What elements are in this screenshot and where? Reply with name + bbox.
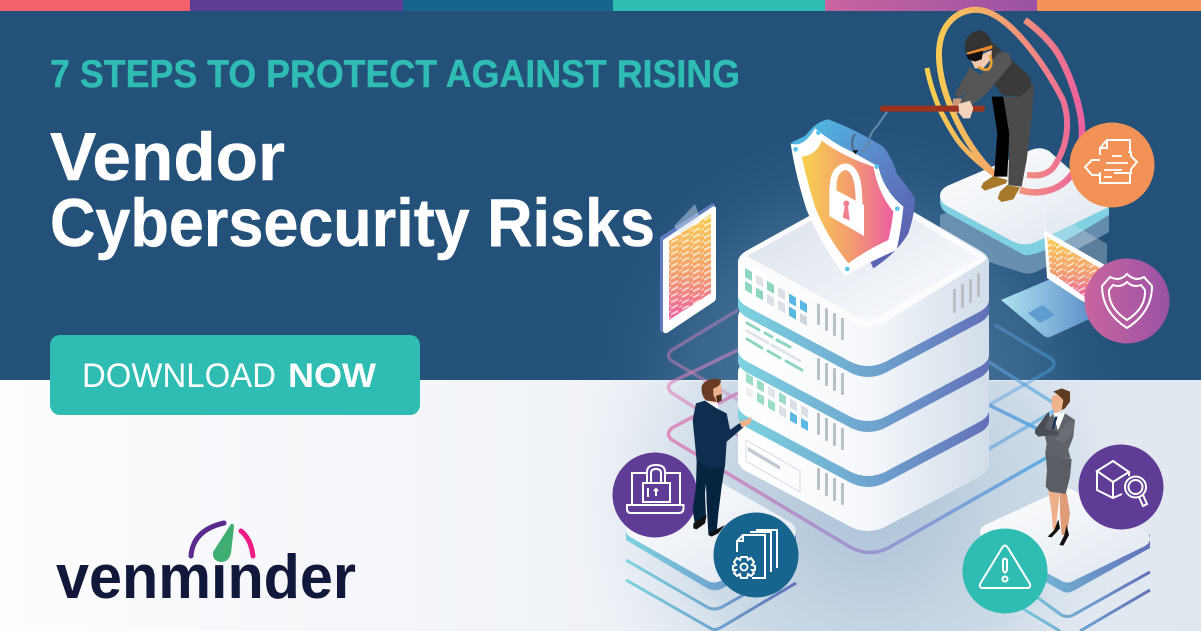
main title: Cybersecurity Risks — [50, 185, 655, 261]
venminder logo: venminder — [56, 543, 356, 612]
icon: cube with magnifier — [1078, 444, 1164, 530]
shield with lock — [791, 110, 915, 276]
businessman figure — [693, 379, 752, 537]
download button: DOWNLOAD — [82, 357, 276, 395]
jacket — [1045, 413, 1075, 458]
top colour strip — [0, 0, 1201, 11]
jacket and arms — [952, 42, 1032, 113]
hacker figure — [880, 31, 1034, 202]
hand — [958, 101, 973, 118]
server layer 1 with top face — [738, 187, 989, 377]
server layer 4 — [738, 352, 989, 531]
navy background — [0, 0, 1201, 381]
connecting circuit lines — [668, 310, 1064, 552]
tablet — [660, 203, 716, 333]
main title: Vendor — [50, 119, 285, 195]
main title — [50, 119, 655, 261]
icon: shield — [1084, 258, 1170, 344]
head — [1052, 394, 1063, 413]
server layer 2 — [738, 242, 989, 432]
icon: documents with gear — [714, 512, 798, 598]
skirt — [1046, 454, 1072, 494]
background glow — [560, 60, 1201, 631]
lower-right platform — [980, 488, 1150, 631]
icon: laptop with lock — [612, 452, 698, 538]
server layer 3 — [738, 297, 989, 487]
download button: NOW — [288, 357, 377, 395]
head with mask — [965, 31, 992, 70]
trousers — [992, 83, 1034, 187]
hacker rings — [927, 10, 1082, 192]
icon: document with arrows — [1070, 122, 1154, 208]
light lower background — [0, 380, 1201, 631]
lower-left platform — [626, 480, 796, 630]
businesswoman figure — [1035, 388, 1075, 546]
top-right platform — [940, 148, 1109, 274]
download button — [50, 335, 420, 415]
boots — [981, 176, 1020, 202]
legs and heels — [1048, 490, 1070, 546]
server stack — [738, 187, 989, 531]
laptop — [1001, 209, 1107, 337]
icon: warning triangle — [962, 528, 1048, 614]
eyebrow heading: 7 STEPS TO PROTECT AGAINST RISING — [50, 53, 740, 96]
fishing rod — [880, 106, 985, 112]
